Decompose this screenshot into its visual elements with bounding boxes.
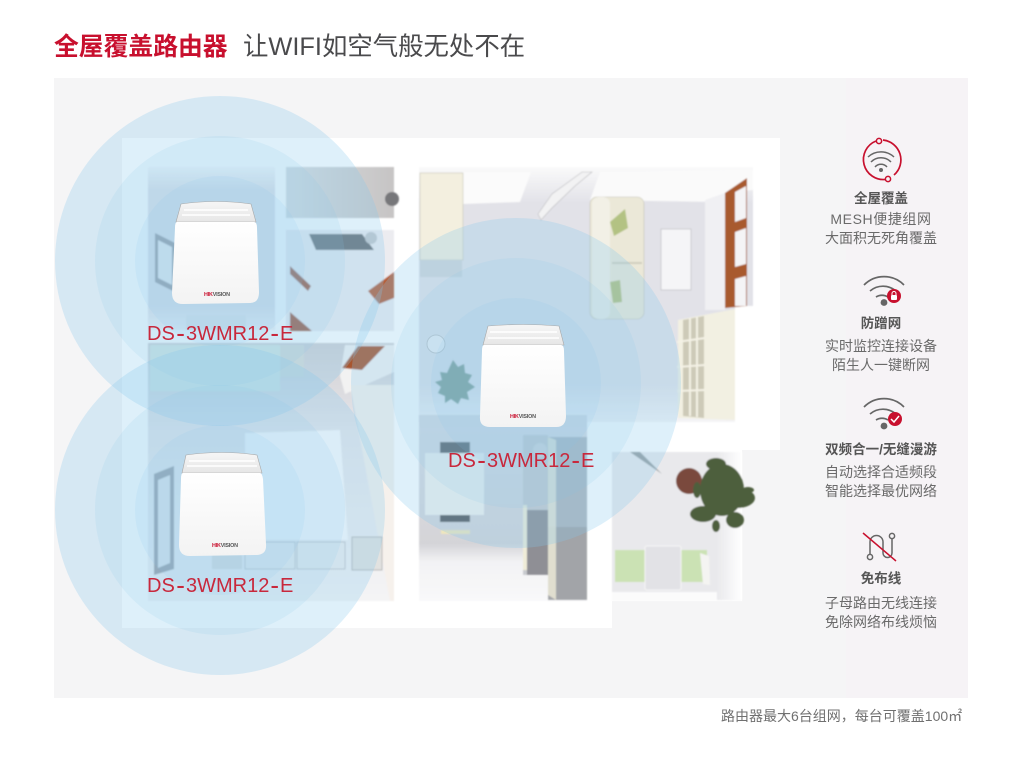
label: lower left router model: DS	[147, 575, 175, 597]
icon: wifi with lock	[864, 277, 904, 306]
router: centre: HIKVISION	[510, 414, 536, 420]
dining table	[440, 442, 470, 456]
sofa	[590, 197, 644, 319]
feature: whole-home coverage	[825, 138, 937, 246]
label: centre router model: DS	[448, 450, 476, 472]
signal coverage: centre router	[351, 218, 681, 548]
feature: dual-band seamless roaming	[825, 399, 937, 499]
room: bedroom	[148, 343, 394, 601]
router: centre	[480, 324, 566, 427]
heading: 双频合一/无缝漫游	[825, 441, 937, 457]
signal coverage: upper left router	[55, 96, 385, 426]
description: 大面积无死角覆盖	[825, 230, 937, 246]
label: centre router model: -	[477, 445, 486, 475]
label: lower left router model: -	[270, 570, 279, 600]
description: 免除网络布线烦恼	[825, 614, 937, 630]
router: upper left	[172, 202, 259, 304]
room: lower living area	[419, 415, 587, 601]
label: centre router model: E	[581, 450, 594, 472]
label: upper left router model: -	[176, 318, 185, 348]
description: 子母路由无线连接	[825, 595, 937, 611]
icon: mesh wifi ring	[863, 138, 901, 182]
room: living room	[419, 167, 753, 422]
label: lower left router model: E	[280, 575, 293, 597]
feature: anti-freeloading	[825, 277, 937, 373]
description: 实时监控连接设备	[825, 338, 937, 354]
heading: 全屋覆盖	[854, 190, 908, 206]
label: upper left router model: -	[270, 318, 279, 348]
tree	[690, 458, 755, 532]
floor plan	[122, 138, 780, 628]
fridge units	[523, 435, 548, 575]
label: upper left router model: E	[280, 323, 293, 345]
title	[54, 33, 525, 61]
label: centre router model: 3WMR12	[487, 450, 570, 472]
description: 陌生人一键断网	[832, 357, 930, 373]
bookshelf	[677, 309, 735, 420]
footnote: 路由器最大6台组网，每台可覆盖100㎡	[721, 708, 962, 724]
description: MESH便捷组网	[830, 211, 932, 227]
label: lower left router model: 3WMR12	[186, 575, 269, 597]
icon: wifi with check	[864, 399, 904, 429]
title: 让WIFI如空气般无处不在	[243, 33, 525, 61]
icon: crossed-out cable	[863, 533, 896, 561]
white wall outline	[122, 138, 780, 628]
side table	[661, 229, 691, 290]
panel: background	[54, 78, 968, 698]
green bench	[615, 550, 707, 582]
heading: 免布线	[861, 570, 902, 586]
router: lower left: HIKVISION	[212, 543, 238, 549]
description: 自动选择合适频段	[825, 464, 937, 480]
label: centre router model: -	[571, 445, 580, 475]
title: 全屋覆盖路由器	[54, 33, 228, 61]
room: upper middle	[286, 167, 399, 218]
round lamp	[427, 335, 445, 353]
wooden window wall	[725, 178, 747, 308]
flower pot	[676, 468, 702, 494]
room: kitchen	[286, 230, 394, 331]
label: upper left router model: 3WMR12	[186, 323, 269, 345]
label: upper left router model: DS	[147, 323, 175, 345]
feature: no wiring	[825, 533, 937, 630]
plant	[435, 360, 475, 404]
room: upper left	[148, 167, 275, 330]
balcony table	[645, 546, 681, 590]
router: lower left	[179, 452, 266, 556]
curtain	[538, 172, 592, 220]
room: balcony	[612, 452, 755, 601]
left cabinet	[420, 173, 463, 260]
sofa cushions	[610, 209, 628, 236]
description: 智能选择最优网络	[825, 483, 937, 499]
label: lower left router model: -	[176, 570, 185, 600]
router: upper left: HIKVISION	[204, 292, 230, 298]
heading: 防蹭网	[861, 315, 901, 331]
signal coverage: lower left router	[55, 345, 385, 675]
